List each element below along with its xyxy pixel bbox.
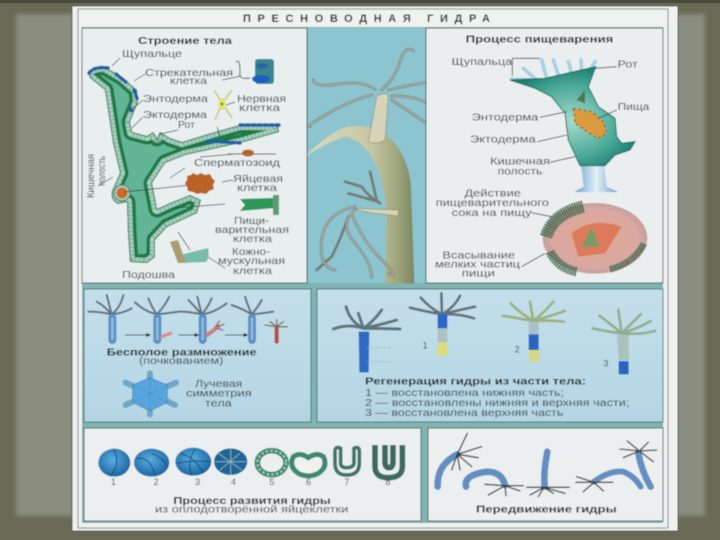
labels: пищи [462, 269, 495, 280]
teal frame [82, 27, 663, 523]
hydra tentacles, pale [512, 60, 595, 80]
tentacles [309, 49, 460, 277]
hydra: regeneration 2 [503, 302, 565, 362]
labels: варительная [215, 224, 289, 236]
stage numbers [111, 477, 390, 487]
stage numbers: 7 [344, 477, 349, 487]
hydra: regeneration 3: 3 [603, 358, 608, 368]
hydra movement bodies [438, 452, 651, 487]
regeneration legend [365, 388, 629, 419]
labels: Нервная [237, 93, 286, 105]
buds [162, 320, 287, 342]
heading: asexual reproduction: Бесполое размножение [107, 347, 257, 358]
digestive cell circle [543, 203, 647, 274]
labels: Подошва [122, 269, 175, 281]
panel: digestion process [426, 28, 663, 283]
labels: Всасывание [442, 250, 516, 261]
heading: development: Процесс развития гидры [173, 496, 331, 507]
hydra body [510, 67, 635, 166]
labels: Кожно- [232, 246, 271, 258]
panel: development [84, 428, 421, 521]
panel: regeneration [317, 289, 663, 422]
labels: Рот [178, 119, 195, 131]
panel: asexual reproduction [84, 289, 311, 422]
panel: movement [428, 428, 663, 521]
hydra: regeneration 1 [410, 293, 475, 356]
labels: Кишечная [490, 156, 550, 167]
heading: body structure: Строение тела [138, 35, 232, 47]
icon: digestive cell [240, 195, 279, 215]
heading: digestion: Процесс пищеварения [466, 34, 614, 45]
regeneration legend: 3 — восстановлена верхняя часть [365, 408, 563, 419]
panel: body structure [82, 28, 307, 283]
labels: полость [96, 156, 108, 186]
leader lines [98, 58, 241, 268]
labels: клетка [170, 75, 207, 87]
heading: regeneration: Регенерация гидры из части тела: [365, 376, 586, 387]
main stem [305, 126, 414, 283]
arrows [125, 334, 247, 336]
labels: клетка [239, 102, 280, 114]
labels: Кишечная [85, 154, 97, 198]
hydra foot [574, 163, 618, 192]
title: ПРЕСНОВОДНАЯ ГИДРА [243, 13, 490, 25]
labels: Щупальце [122, 48, 182, 60]
label: radial symmetry: тела [205, 398, 232, 409]
hydra movement tentacles [452, 433, 657, 497]
labels: Эктодерма [143, 109, 207, 121]
labels: сока на пищу [452, 208, 532, 219]
labels: мускульная [218, 255, 285, 267]
stage numbers: 8 [385, 477, 390, 487]
icon: stinging cell [236, 59, 274, 84]
labels: Действие [464, 189, 522, 200]
subheading: (почкованием) [139, 356, 223, 367]
labels: Стрекательная [145, 67, 233, 79]
labels [85, 48, 289, 281]
icon: radial symmetry [126, 373, 176, 414]
labels: Яйцевая [233, 173, 283, 185]
stage numbers: 6 [306, 477, 311, 487]
stage numbers: 5 [269, 477, 274, 487]
labels: полость [498, 166, 542, 177]
stage numbers: 3 [195, 477, 200, 487]
food [573, 108, 607, 138]
stage numbers: 4 [231, 477, 236, 487]
labels: Рот [618, 60, 638, 71]
labels: Эктодерма [470, 135, 536, 146]
embryo stages [98, 445, 402, 478]
stage numbers: 1 [111, 477, 116, 487]
card inner line [78, 9, 668, 528]
panel: hydra photo illustration [305, 28, 460, 283]
hydra: cut original [333, 307, 400, 372]
icon: nerve cell [214, 90, 232, 120]
labels: Энтодерма [143, 93, 208, 105]
side bud [355, 208, 398, 216]
labels: Энтодерма [472, 113, 539, 124]
regeneration legend: 2 — восстановлены нижняя и верхняя части; [365, 398, 629, 409]
hydra: regeneration 1: 1 [423, 340, 428, 350]
gonad [114, 185, 130, 201]
stinging cell clusters [89, 68, 280, 143]
labels: Щупальца [452, 57, 513, 68]
labels: клетка [237, 182, 277, 194]
heading: movement: Передвижение гидры [476, 504, 617, 515]
hydra: regeneration 3 [593, 310, 655, 374]
polyp body [368, 94, 388, 143]
label: radial symmetry: Лучевая [195, 379, 242, 390]
hydra sequence [88, 295, 273, 340]
labels [435, 57, 650, 280]
icon: muscle cell [170, 240, 209, 263]
subheading: development: из оплодотворённой яйцеклетки [155, 505, 348, 516]
hydra: regeneration 2: 2 [515, 345, 520, 355]
labels: пищеварительного [436, 198, 550, 209]
labels: клетка [233, 233, 272, 245]
labels: мелких частиц [435, 260, 520, 271]
icon: sperm [228, 150, 276, 156]
label: radial symmetry: симметрия [186, 389, 252, 400]
labels: клетка [233, 265, 272, 277]
icon: egg cell [185, 173, 215, 194]
regeneration legend: 1 — восстановлена нижняя часть; [365, 388, 564, 399]
leader lines [512, 58, 617, 267]
labels: Пища [618, 102, 650, 113]
labels: Пищи- [234, 215, 270, 227]
labels: Сперматозоид [194, 157, 280, 169]
diagram: hydra cross-section [88, 67, 280, 263]
label: radial symmetry [186, 379, 252, 409]
stage numbers: 2 [154, 477, 159, 487]
